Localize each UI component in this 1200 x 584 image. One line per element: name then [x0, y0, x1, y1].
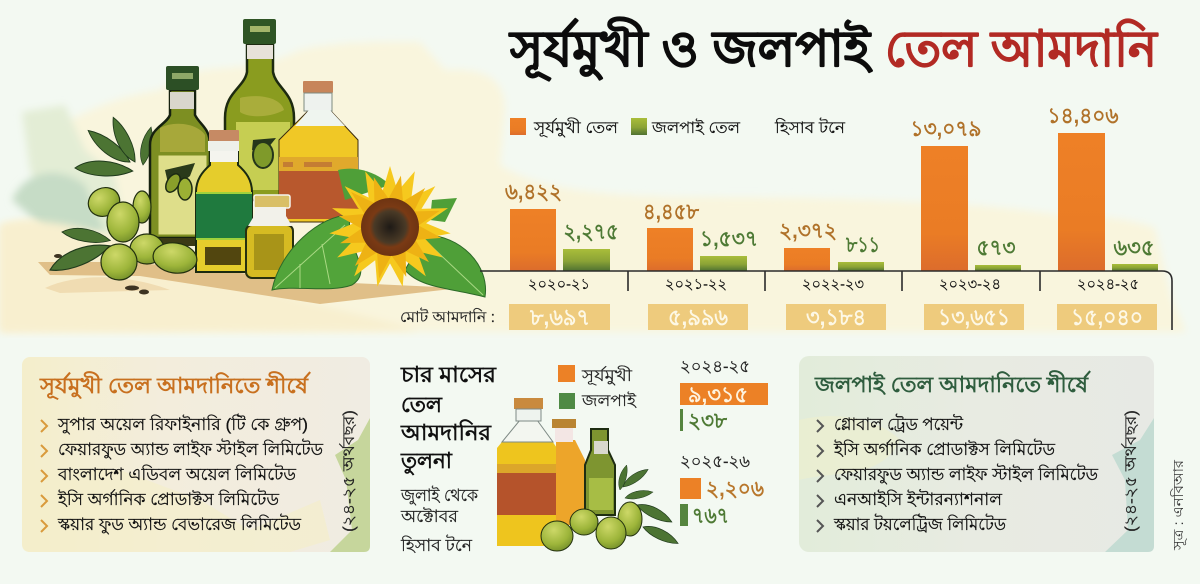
- year labels: ২০২৩-২৪: [939, 276, 1001, 293]
- chart legend: জলপাই তেল: [651, 119, 741, 137]
- period note: হিসাব টনে: [400, 535, 473, 555]
- panel heading: সূর্যমুখী তেল আমদানিতে শীর্ষে: [39, 371, 311, 400]
- total imports row: ৮,৬৯৭: [529, 304, 590, 330]
- bar values: sunflower oil: ১৪,৪০৬: [1048, 103, 1118, 128]
- year labels: ২০২৪-২৫: [1077, 276, 1139, 293]
- illustration: bottles and olives: [497, 398, 680, 551]
- bottle: olive oil, left: [150, 66, 210, 246]
- title: [508, 16, 1159, 82]
- period note: জুলাই থেকে: [400, 486, 479, 506]
- list arrows: [817, 420, 823, 532]
- list arrows: [41, 420, 47, 532]
- chart legend: সূর্যমুখী তেল: [533, 118, 619, 138]
- comparison heading: [400, 362, 497, 476]
- fiscal year note: (২৪-২৫ অর্থবছর): [1121, 410, 1140, 532]
- comparison legend: সূর্যমুখী: [581, 366, 632, 386]
- comparison heading: আমদানির: [400, 419, 492, 445]
- bottle: tall olive oil, back: [225, 19, 294, 200]
- total imports row: [400, 304, 1157, 330]
- bottle: plastic sunflower oil: [279, 81, 358, 222]
- illustration: oil bottles, olives and sunflower: [38, 19, 486, 304]
- panel: four-month comparison: [400, 357, 768, 555]
- importer list: গ্লোবাল ট্রেড পয়েন্ট: [834, 414, 964, 434]
- comparison bars: 2024-25: ৯,৩১৫: [688, 382, 748, 407]
- bar chart: sunflower vs olive imports by year: [480, 103, 1172, 330]
- axis and year dividers: [480, 271, 1172, 330]
- olives: [84, 183, 199, 280]
- importer list: [833, 414, 1098, 534]
- sunflower leaves: [272, 169, 486, 297]
- bar values: sunflower oil: ১৩,০৭৯: [910, 116, 982, 141]
- comparison heading: চার মাসের: [400, 362, 497, 387]
- bar values: sunflower oil: ৪,৪৫৮: [643, 199, 700, 224]
- bar values: olive oil: ৫৭৩: [976, 235, 1016, 260]
- year labels: ২০২১-২২: [665, 276, 727, 293]
- olive branch leaves: [47, 115, 155, 277]
- bar values: olive oil: ১,৫৩৭: [700, 226, 758, 251]
- bar values: olive oil: [564, 219, 1154, 260]
- bars: sunflower oil: [510, 133, 1105, 271]
- comparison bars: 2024-25: ২০২৪-২৫: [680, 357, 750, 376]
- importer list: স্কয়ার টয়লেট্রিজ লিমিটেড: [833, 514, 1006, 534]
- period note: [400, 486, 479, 555]
- source note: সূত্র : এনবিআর: [1170, 460, 1187, 551]
- fiscal year note: (২৪-২৫ অর্থবছর): [339, 410, 358, 532]
- importer list: সুপার অয়েল রিফাইনারি (টি কে গ্রুপ): [57, 414, 308, 434]
- importer list: বাংলাদেশ এডিবল অয়েল লিমিটেড: [57, 464, 296, 484]
- wooden board: [38, 262, 460, 304]
- sunflower: [328, 165, 452, 289]
- total imports row: ৩,১৮৪: [806, 304, 866, 330]
- comparison bars: 2024-25: ২৩৮: [688, 408, 728, 433]
- comparison legend: জলপাই: [581, 392, 637, 410]
- bar values: olive oil: ৮১১: [845, 232, 880, 257]
- panel: top sunflower oil importers: [22, 357, 370, 552]
- bar values: olive oil: ২,২৭৫: [564, 219, 618, 244]
- period note: অক্টোবর: [400, 507, 459, 526]
- comparison bars: 2025-26: ২০২৫-২৬: [680, 452, 750, 471]
- importer list: ইসি অর্গানিক প্রোডাক্টস লিমিটেড: [57, 489, 279, 509]
- comparison bars: 2025-26: [680, 452, 764, 528]
- chart legend: হিসাব টনে: [774, 118, 845, 137]
- background wash: cream blobs: [0, 42, 1186, 332]
- comparison legend: [558, 365, 637, 410]
- title: তেল আমদানি: [885, 19, 1159, 77]
- bar values: olive oil: ৬৩৫: [1114, 235, 1154, 260]
- chart legend: [510, 118, 845, 138]
- total imports row: ১৫,০৪০: [1071, 304, 1143, 330]
- panel heading: জলপাই তেল আমদানিতে শীর্ষে: [814, 370, 1091, 397]
- bars: olive oil: [563, 249, 1158, 271]
- comparison heading: তেল: [401, 392, 444, 417]
- importer list: ইসি অর্গানিক প্রোডাক্টস লিমিটেড: [833, 439, 1055, 459]
- year labels: [528, 276, 1139, 293]
- bottle: small green label: [196, 130, 252, 272]
- small jar: [246, 195, 293, 278]
- year labels: ২০২২-২৩: [802, 276, 864, 293]
- importer list: ফেয়ারফুড অ্যান্ড লাইফ স্টাইল লিমিটেড: [834, 464, 1098, 484]
- bar values: sunflower oil: ২,৩৭২: [779, 218, 837, 243]
- importer list: ফেয়ারফুড অ্যান্ড লাইফ স্টাইল লিমিটেড: [58, 439, 323, 459]
- year labels: ২০২০-২১: [528, 276, 590, 293]
- panel: top olive oil importers: [799, 356, 1154, 552]
- importer list: এনআইসি ইন্টারন্যাশনাল: [834, 489, 1002, 509]
- comparison bars: 2025-26: ২,২০৬: [706, 476, 764, 501]
- comparison bars: 2024-25: [680, 357, 768, 433]
- bar values: sunflower oil: [505, 103, 1118, 243]
- importer list: স্কয়ার ফুড অ্যান্ড বেভারেজ লিমিটেড: [57, 514, 301, 534]
- comparison heading: তুলনা: [400, 448, 454, 476]
- total imports row: মোট আমদানি :: [400, 308, 495, 326]
- bar values: sunflower oil: ৬,৪২২: [505, 179, 562, 204]
- seeds: [54, 254, 149, 294]
- importer list: [57, 414, 323, 534]
- total imports row: ৫,৯৯৬: [668, 304, 728, 330]
- total imports row: ১৩,৬৫১: [938, 304, 1010, 330]
- title: সূর্যমুখী ও জলপাই: [508, 16, 873, 82]
- comparison bars: 2025-26: ৭৬৭: [692, 503, 729, 528]
